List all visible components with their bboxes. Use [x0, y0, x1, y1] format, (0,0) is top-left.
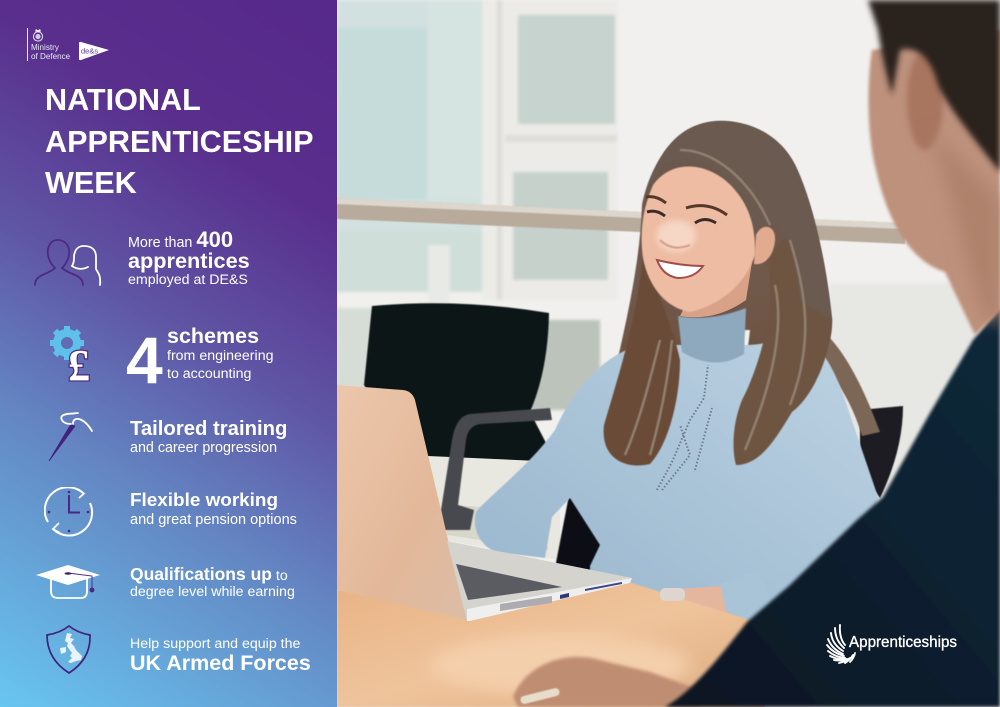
item: 4 schemes: to accounting	[167, 366, 251, 382]
text: schemes	[167, 324, 259, 348]
hair top	[645, 121, 832, 320]
icon: two people	[34, 239, 102, 286]
icon: shield with UK map	[46, 625, 91, 674]
face	[642, 166, 755, 312]
hair highlights	[625, 150, 805, 455]
item: armed forces: UK Armed Forces	[130, 651, 311, 675]
logo: de&s	[79, 42, 109, 60]
item: 400 apprentices	[34, 227, 250, 288]
right cuff	[720, 570, 775, 625]
laptop front edge	[467, 578, 632, 621]
glass balustrade rail	[337, 198, 905, 244]
smile	[657, 260, 703, 278]
laptop keyboard	[456, 564, 562, 600]
laptop vent and ports	[500, 582, 622, 611]
laptop	[337, 385, 632, 621]
item: flexible working: and great pension options	[130, 512, 297, 528]
chair arm	[441, 408, 552, 530]
icon: graduation cap	[36, 565, 100, 599]
watch	[660, 588, 685, 601]
item: 4 schemes	[50, 323, 273, 397]
laptop lid	[337, 385, 467, 620]
numeral 4: 4	[126, 323, 163, 397]
hair back	[604, 121, 832, 466]
title	[45, 83, 314, 200]
foreground hand	[513, 657, 700, 707]
sweater pattern	[657, 365, 712, 490]
logo: Apprenticeships	[827, 625, 957, 663]
item: flexible working	[44, 487, 297, 536]
office background	[337, 0, 1000, 707]
woman	[475, 121, 880, 640]
ear	[754, 227, 775, 264]
text: More than 400	[128, 227, 233, 252]
eyes	[647, 211, 716, 223]
text: Tailored training	[130, 418, 287, 440]
icon: gear and pound	[50, 326, 90, 385]
text: Flexible working	[130, 490, 278, 511]
item: 4 schemes: from engineering	[167, 348, 273, 364]
icon: needle and thread	[48, 412, 93, 462]
nose shading	[660, 240, 690, 248]
office chair	[364, 303, 903, 498]
logo: de&s: de&s	[81, 46, 98, 56]
title: WEEK	[45, 166, 137, 200]
item: 400 apprentices: employed at DE&S	[128, 272, 248, 288]
face highlight	[656, 220, 696, 252]
item: qualifications	[36, 564, 295, 600]
icon: royal crest	[32, 29, 44, 42]
item: qualifications: degree level while earning	[130, 584, 295, 600]
sweater	[475, 335, 878, 640]
photo: apprentice smiling at a laptop in an office	[337, 0, 1000, 707]
hand	[664, 586, 730, 616]
foreground hair	[868, 0, 1000, 172]
foreground person	[513, 0, 1000, 707]
logo words: of Defence	[31, 52, 70, 60]
eyebrows	[646, 197, 727, 215]
turtle neck	[678, 308, 746, 363]
laptop base	[447, 541, 632, 621]
logo words	[31, 42, 70, 60]
item: armed forces	[46, 625, 311, 675]
title: NATIONAL	[45, 83, 201, 117]
title: APPRENTICESHIP	[45, 125, 314, 159]
item: 400 apprentices: apprentices	[128, 248, 250, 273]
logo: Apprenticeships: Apprenticeships	[849, 634, 957, 651]
text: Qualifications up to	[130, 564, 288, 584]
foreground torso	[665, 308, 1000, 707]
logo words: Ministry	[31, 42, 59, 52]
text: Help support and equip the	[130, 636, 300, 652]
foreground ear	[907, 50, 943, 150]
foreground skin shadow	[930, 130, 1000, 320]
item: tailored training	[48, 412, 287, 462]
icon: clock with arrows	[44, 487, 94, 536]
table top	[337, 583, 765, 707]
hair tail behind shoulder	[805, 325, 880, 436]
logo: Ministry of Defence	[27, 28, 72, 61]
neck	[680, 262, 752, 317]
chair seat gap under arm	[555, 490, 605, 572]
hair locks over sweater	[604, 240, 680, 465]
left gradient panel	[0, 0, 337, 707]
item: tailored training: and career progression	[130, 440, 277, 456]
foreground neck and face	[869, 30, 1000, 335]
white desk behind	[428, 456, 560, 560]
